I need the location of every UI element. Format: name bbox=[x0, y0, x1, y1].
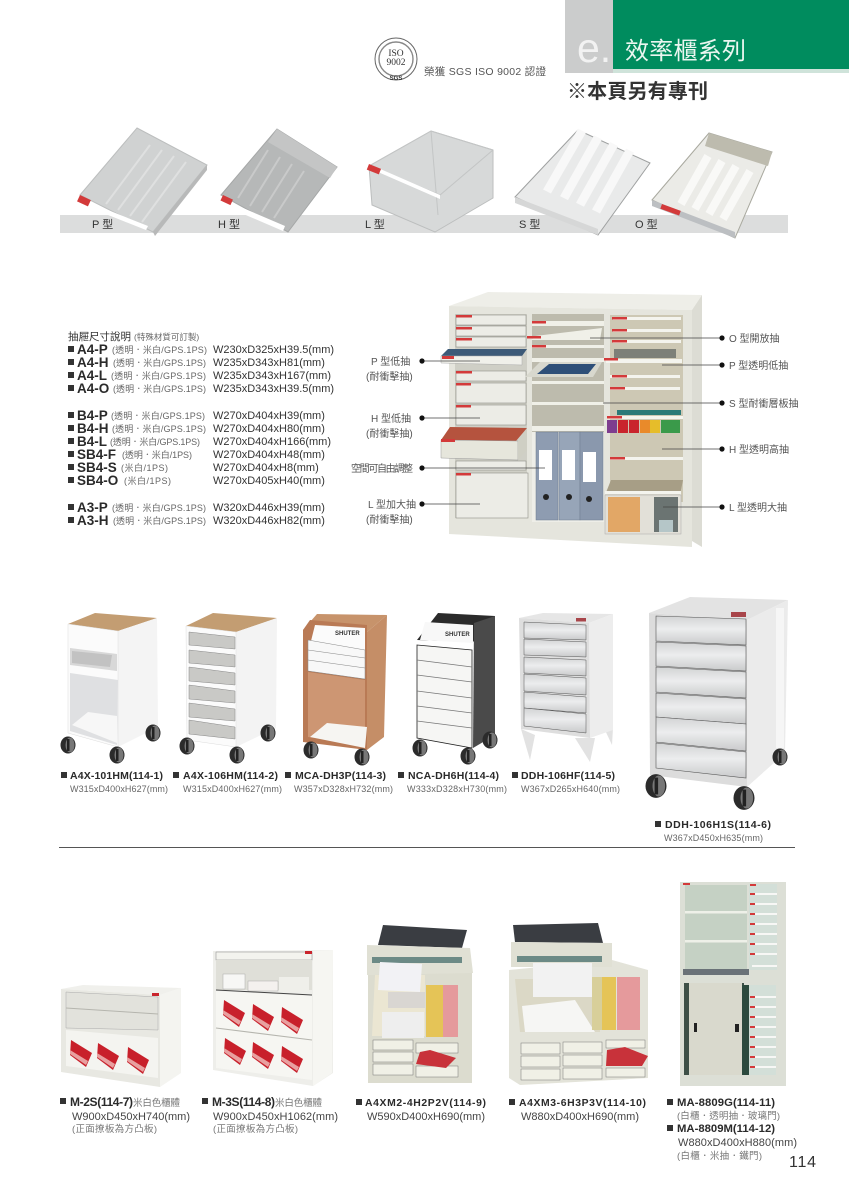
A4 group: (透明．米白/GPS.1PS) bbox=[111, 370, 206, 381]
B4 group bbox=[68, 408, 331, 488]
panel: main cabinet diagram bbox=[351, 292, 798, 547]
left callout labels: P 型低抽 bbox=[371, 355, 410, 368]
label: A4XM2-4H2P2V: W590xD400xH690(mm) bbox=[367, 1111, 485, 1123]
drawer O bbox=[652, 133, 772, 238]
product: NCA-DH6H bbox=[412, 613, 498, 764]
right callout labels bbox=[729, 332, 798, 514]
A4 group: W230xD325xH39.5(mm) bbox=[213, 344, 334, 356]
label: NCA-DH6H: W333xD328xH730(mm) bbox=[407, 784, 507, 794]
label: M-3S: (正面撩板為方凸板) bbox=[213, 1123, 298, 1135]
label: MA-8809G and MA-8809M bbox=[667, 1097, 797, 1162]
A4 group: (透明．米白/GPS.1PS) bbox=[113, 383, 206, 394]
right callout labels: L 型透明大抽 bbox=[729, 501, 787, 514]
label: M-2S: W900xD450xH740(mm) bbox=[72, 1111, 190, 1123]
middle shelf column bbox=[525, 314, 604, 522]
label: MA-8809G and MA-8809M: (白櫃．透明抽．玻璃門) bbox=[677, 1110, 780, 1122]
label: A4XM2-4H2P2V: A4XM2-4H2P2V(114-9) bbox=[365, 1098, 486, 1109]
type labels: S 型 bbox=[519, 217, 540, 231]
label: NCA-DH6H bbox=[398, 770, 507, 794]
coloured boxes in H drawer bbox=[607, 410, 681, 433]
B4 group: (透明．米白/1PS) bbox=[122, 449, 192, 460]
label: MA-8809G and MA-8809M: MA-8809G(114-11) bbox=[677, 1097, 775, 1109]
A4 group: W235xD343xH39.5(mm) bbox=[213, 383, 334, 395]
product: MCA-DH3P bbox=[303, 614, 387, 766]
label: M-2S bbox=[60, 1095, 190, 1135]
type labels: L 型 bbox=[365, 217, 385, 231]
B4 group: W270xD404xH166(mm) bbox=[213, 436, 331, 448]
list heading: 抽屜尺寸說明 (特殊材質可訂製) bbox=[68, 330, 199, 343]
right callouts bbox=[590, 335, 725, 510]
A4 group bbox=[68, 342, 334, 396]
label: A4X-101HM bbox=[61, 770, 168, 794]
notice: separate catalogue: ※本頁另有專刊 bbox=[567, 80, 708, 103]
B4 group: (米白/1PS) bbox=[121, 462, 168, 473]
right callout labels: H 型透明高抽 bbox=[729, 443, 789, 456]
label: MCA-DH3P: W357xD328xH732(mm) bbox=[294, 784, 393, 794]
label: M-3S: 米白色櫃體 bbox=[275, 1097, 322, 1109]
left callout labels: H 型低抽 bbox=[371, 412, 411, 425]
A3 group: (透明．米白/GPS.1PS) bbox=[113, 515, 206, 526]
A3 group: A3-H bbox=[77, 513, 109, 528]
label: DDH-106H1S bbox=[655, 819, 771, 843]
left drawer column bbox=[441, 314, 528, 518]
right callout labels: P 型透明低抽 bbox=[729, 359, 788, 372]
label: A4X-106HM bbox=[173, 770, 282, 794]
B4 group: W270xD404xH48(mm) bbox=[213, 449, 325, 461]
B4 group: W270xD404xH39(mm) bbox=[213, 410, 325, 422]
left callout labels: (耐衝擊抽) bbox=[366, 513, 413, 526]
label: DDH-106HF: DDH-106HF(114-5) bbox=[521, 770, 615, 782]
label: DDH-106H1S: W367xD450xH635(mm) bbox=[664, 833, 763, 843]
A3 group: (透明．米白/GPS.1PS) bbox=[112, 502, 206, 513]
right callout labels: S 型耐衝層板抽 bbox=[729, 397, 798, 410]
label: A4XM3-6H3P3V: W880xD400xH690(mm) bbox=[521, 1111, 639, 1123]
label: A4XM2-4H2P2V bbox=[356, 1098, 486, 1123]
type labels: H 型 bbox=[218, 217, 240, 231]
B4 group: B4-H bbox=[77, 421, 109, 436]
cabinet body bbox=[449, 292, 702, 547]
product: A4X-106HM bbox=[180, 613, 277, 764]
A4 group: A4-H bbox=[77, 355, 109, 370]
label: A4X-106HM: A4X-106HM(114-2) bbox=[183, 770, 278, 782]
label: MA-8809G and MA-8809M: MA-8809M(114-12) bbox=[677, 1123, 775, 1135]
A4 group: W235xD343xH167(mm) bbox=[213, 370, 331, 382]
label: DDH-106HF bbox=[512, 770, 620, 794]
label: M-3S: M-3S(114-8) bbox=[212, 1095, 275, 1109]
panel: drawer dimensions list bbox=[68, 330, 334, 528]
icon: ISO 9002 badge: SGS bbox=[390, 76, 402, 82]
B4 group: (米白/1PS) bbox=[124, 475, 171, 486]
type labels: P 型 bbox=[92, 217, 113, 231]
A4 group: A4-P bbox=[77, 342, 108, 357]
A4 group: (透明．米白/GPS.1PS) bbox=[113, 357, 206, 368]
A4 group: W235xD343xH81(mm) bbox=[213, 357, 325, 369]
product: MCA-DH3P: SHUTER bbox=[335, 631, 360, 637]
A4 group: (透明．米白/GPS.1PS) bbox=[112, 344, 207, 355]
label: A4X-101HM: W315xD400xH627(mm) bbox=[70, 784, 168, 794]
left callout labels bbox=[351, 355, 416, 526]
label: A4X-106HM: W315xD400xH627(mm) bbox=[183, 784, 282, 794]
A3 group bbox=[68, 500, 325, 528]
label: MA-8809G and MA-8809M: (白櫃．米抽．鐵門) bbox=[677, 1150, 762, 1162]
product: M-3S bbox=[213, 950, 333, 1086]
panel: drawer types bbox=[60, 128, 788, 238]
label: M-3S: W900xD450xH1062(mm) bbox=[213, 1111, 338, 1123]
B4 group: SB4-S bbox=[77, 460, 117, 475]
left callout labels: L 型加大抽 bbox=[368, 498, 416, 511]
header tab: e. bbox=[577, 25, 611, 71]
label: A4X-101HM: A4X-101HM(114-1) bbox=[70, 770, 163, 782]
header tab bbox=[565, 0, 849, 73]
left callouts bbox=[419, 358, 545, 507]
left callout labels: 空間可自由調整 bbox=[351, 462, 413, 475]
header tab: 效率櫃系列 bbox=[625, 38, 746, 65]
label: DDH-106HF: W367xD265xH640(mm) bbox=[521, 784, 620, 794]
B4 group: W270xD404xH8(mm) bbox=[213, 462, 319, 474]
right drawer column bbox=[604, 315, 683, 534]
A3 group: W320xD446xH82(mm) bbox=[213, 515, 325, 527]
label: M-2S: M-2S(114-7) bbox=[70, 1095, 133, 1109]
product: A4XM2-4H2P2V bbox=[367, 925, 473, 1083]
drawer S bbox=[515, 130, 650, 235]
page number: 114 bbox=[789, 1154, 816, 1171]
open H drawer bbox=[441, 427, 527, 460]
label: MCA-DH3P: MCA-DH3P(114-3) bbox=[295, 770, 386, 782]
binders bbox=[536, 432, 603, 520]
product: NCA-DH6H: SHUTER bbox=[445, 632, 470, 638]
icon: ISO 9002 badge: ISO bbox=[388, 49, 404, 59]
A3 group: A3-P bbox=[77, 500, 108, 515]
drawer P bbox=[77, 128, 207, 236]
product: MA-8809 bbox=[680, 882, 786, 1086]
open P drawer bbox=[441, 349, 527, 365]
B4 group: SB4-O bbox=[77, 473, 118, 488]
type labels: O 型 bbox=[635, 217, 658, 231]
B4 group: (透明．米白/GPS.1PS) bbox=[111, 410, 205, 421]
B4 group: W270xD405xH40(mm) bbox=[213, 475, 325, 487]
A4 group: A4-O bbox=[77, 381, 109, 396]
product: M-2S bbox=[61, 985, 181, 1087]
right callout labels: O 型開放抽 bbox=[729, 332, 780, 345]
label strip bbox=[60, 215, 788, 233]
B4 group: SB4-F bbox=[77, 447, 116, 462]
label: MA-8809G and MA-8809M: W880xD400xH880(mm) bbox=[678, 1137, 797, 1149]
B4 group: B4-P bbox=[77, 408, 108, 423]
product: DDH-106H1S bbox=[646, 597, 788, 810]
icon: ISO 9002 badge: 9002 bbox=[386, 58, 406, 68]
A4 group: A4-L bbox=[77, 368, 107, 383]
A3 group: W320xD446xH39(mm) bbox=[213, 502, 325, 514]
B4 group: W270xD404xH80(mm) bbox=[213, 423, 325, 435]
label: A4XM3-6H3P3V bbox=[509, 1098, 646, 1123]
B4 group: B4-L bbox=[77, 434, 107, 449]
left callout labels: (耐衝擊抽) bbox=[366, 370, 413, 383]
drawer L bbox=[367, 131, 493, 232]
label: MCA-DH3P bbox=[285, 770, 393, 794]
type labels bbox=[92, 217, 658, 231]
icon: ISO 9002 badge bbox=[375, 38, 417, 82]
drawer H bbox=[220, 129, 337, 232]
label: M-3S bbox=[202, 1095, 338, 1135]
product: A4X-101HM bbox=[60, 613, 160, 764]
B4 group: (透明．米白/GPS.1PS) bbox=[112, 423, 206, 434]
B4 group: (透明．米白/GPS.1PS) bbox=[110, 436, 200, 447]
certification text: 榮獲 SGS ISO 9002 認證 bbox=[424, 65, 546, 78]
open L drawer bbox=[605, 480, 683, 534]
label: M-2S: (正面撩板為方凸板) bbox=[72, 1123, 157, 1135]
product: DDH-106HF bbox=[519, 613, 613, 762]
product: A4XM3-6H3P3V bbox=[509, 923, 648, 1085]
label: A4XM3-6H3P3V: A4XM3-6H3P3V(114-10) bbox=[519, 1098, 646, 1109]
label: NCA-DH6H: NCA-DH6H(114-4) bbox=[408, 770, 499, 782]
label: M-2S: 米白色櫃體 bbox=[133, 1097, 180, 1109]
label: DDH-106H1S: DDH-106H1S(114-6) bbox=[665, 819, 771, 831]
left callout labels: (耐衝擊抽) bbox=[366, 427, 413, 440]
section divider bbox=[59, 847, 795, 848]
